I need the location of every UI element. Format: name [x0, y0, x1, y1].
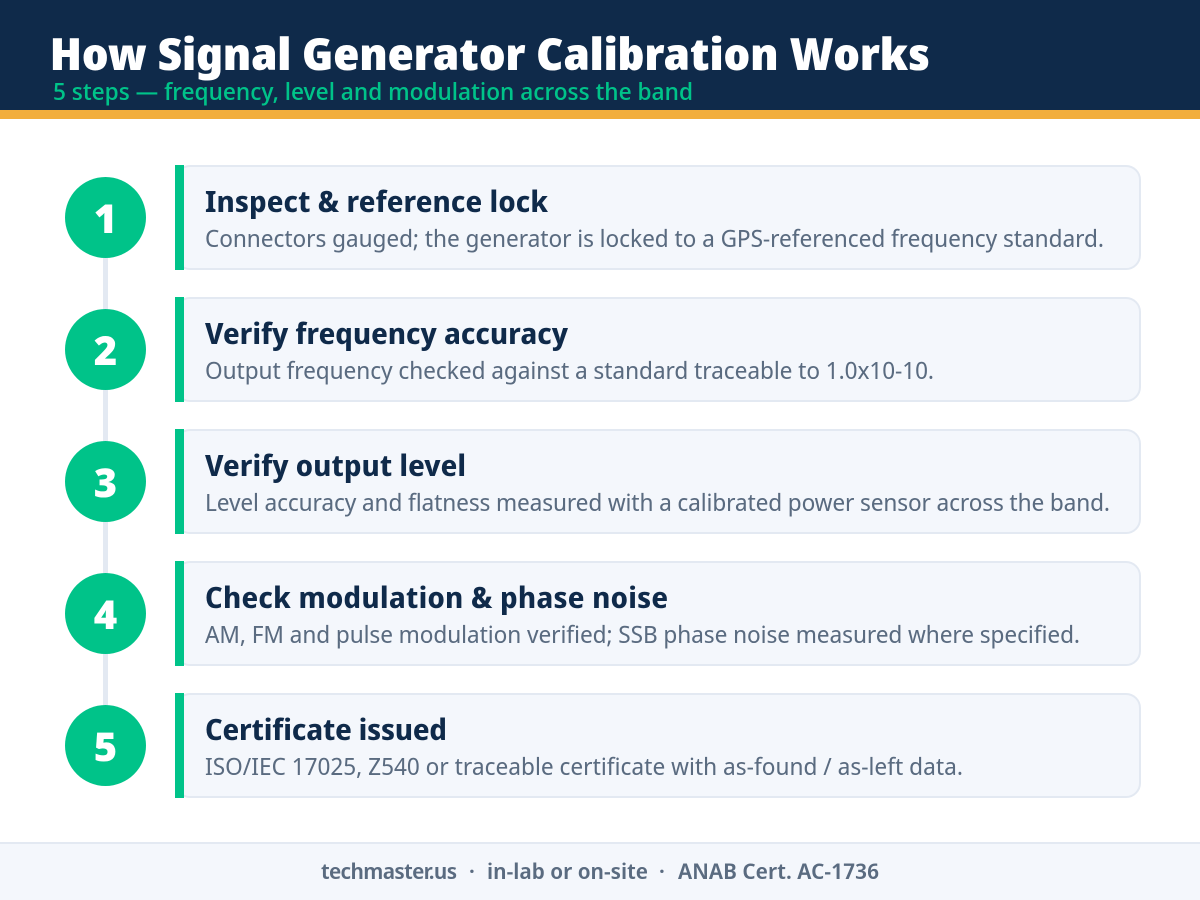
- footer text: in-lab or on-site: [487, 856, 648, 886]
- step 4: [65, 561, 1140, 666]
- timeline connectors: [103, 258, 108, 728]
- step 1 accent bar: [175, 165, 184, 270]
- step 2 number badge: [65, 309, 146, 390]
- step 3 card: [176, 430, 1140, 533]
- step 5 card: [176, 694, 1140, 797]
- step 2: [65, 297, 1140, 402]
- step 4 number badge: 4: [94, 586, 117, 641]
- footer band: [0, 842, 1200, 900]
- footer text: ·: [659, 856, 665, 886]
- step 4 description: AM, FM and pulse modulation verified; SSB phase noise measured where specified.: [205, 618, 1080, 651]
- step 1 number badge: [65, 177, 146, 258]
- header band: [0, 0, 1200, 119]
- step 2 description: Output frequency checked against a standard traceable to 1.0x10-10.: [205, 354, 934, 387]
- step 1 number badge: 1: [94, 190, 117, 245]
- step 2 heading: Verify frequency accuracy: [205, 313, 569, 353]
- step 5 description: ISO/IEC 17025, Z540 or traceable certificate with as-found / as-left data.: [205, 750, 963, 783]
- title: How Signal Generator Calibration Works: [50, 23, 930, 83]
- step 1 card: [176, 166, 1140, 269]
- step 5 number badge: 5: [94, 718, 117, 773]
- step 1 heading: Inspect & reference lock: [205, 181, 548, 221]
- step 4 card: [176, 562, 1140, 665]
- footer text: ·: [469, 856, 475, 886]
- step 5 heading: Certificate issued: [205, 709, 447, 749]
- step 5: [65, 693, 1140, 798]
- step 2 number badge: 2: [94, 322, 117, 377]
- step 2 accent bar: [175, 297, 184, 402]
- step 2 card: [176, 298, 1140, 401]
- step 1 description: Connectors gauged; the generator is locked to a GPS-referenced frequency standard.: [205, 222, 1104, 255]
- step 3 number badge: [65, 441, 146, 522]
- subtitle: 5 steps — frequency, level and modulation across the band: [53, 75, 693, 108]
- footer text: [321, 856, 879, 886]
- step 3: [65, 429, 1140, 534]
- step 4 heading: Check modulation & phase noise: [205, 577, 668, 617]
- step 5 accent bar: [175, 693, 184, 798]
- step 4 number badge: [65, 573, 146, 654]
- step 1: [65, 165, 1140, 270]
- step 3 description: Level accuracy and flatness measured with a calibrated power sensor across the band.: [205, 486, 1110, 519]
- step 3 number badge: 3: [94, 454, 117, 509]
- footer text: ANAB Cert. AC-1736: [678, 856, 879, 886]
- step 5 number badge: [65, 705, 146, 786]
- step 3 heading: Verify output level: [205, 445, 466, 485]
- step 4 accent bar: [175, 561, 184, 666]
- footer text: techmaster.us: [321, 856, 457, 886]
- step 3 accent bar: [175, 429, 184, 534]
